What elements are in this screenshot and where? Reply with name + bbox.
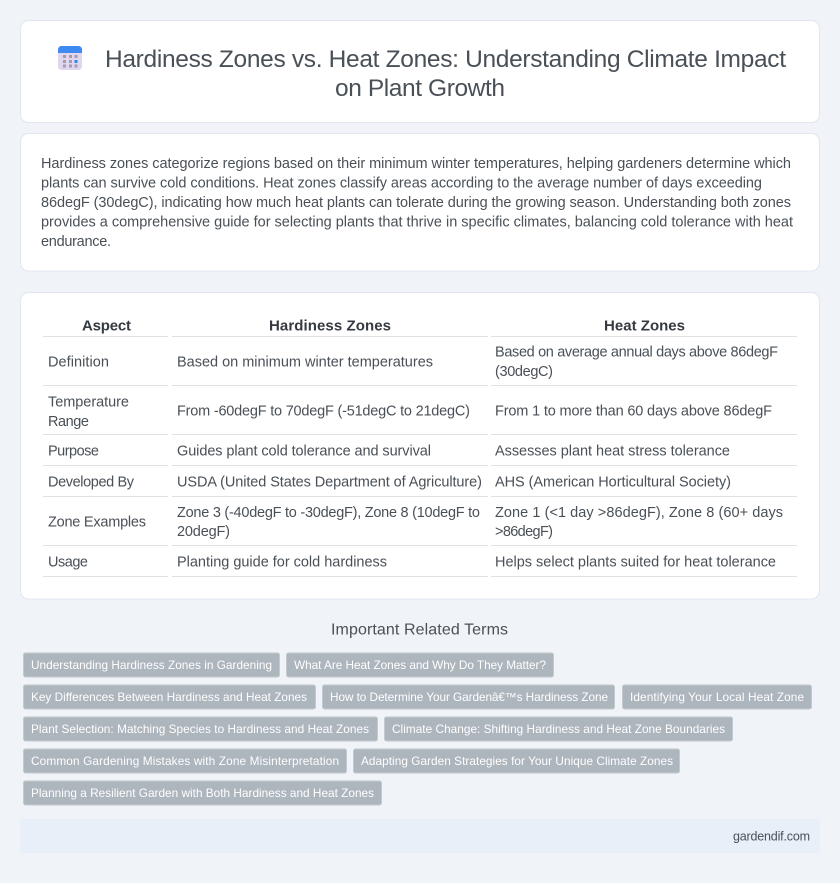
row: temperature range xyxy=(48,394,772,430)
row: temperature range: Range xyxy=(48,414,89,430)
row: usage xyxy=(48,554,776,570)
table header: Heat Zones xyxy=(604,318,685,334)
row: usage: Helps select plants suited for heat tolerance xyxy=(495,554,776,570)
text block: introduction: 86degF (30degC), indicating how much heat plants can tolerate during the growing season. Understanding both zones xyxy=(41,195,791,211)
title: Hardiness Zones vs. Heat Zones: Understanding Climate Impact xyxy=(105,46,786,73)
row: definition: Based on minimum winter temperatures xyxy=(177,354,433,370)
table header: Aspect xyxy=(82,318,131,334)
row: definition xyxy=(48,344,778,380)
row: purpose: Guides plant cold tolerance and survival xyxy=(177,444,431,460)
text block: introduction: Hardiness zones categorize regions based on their minimum winter temperatures, helping gardeners determine which xyxy=(41,156,791,172)
text block: introduction xyxy=(41,156,793,250)
related term tags: Plant Selection: Matching Species to Hardiness and Heat Zones xyxy=(31,722,369,736)
related term tags: Identifying Your Local Heat Zone xyxy=(630,690,804,704)
row: zone examples xyxy=(48,505,783,540)
footer xyxy=(20,819,820,853)
footer: gardendif.com xyxy=(733,830,810,844)
row: zone examples: Zone 1 (<1 day >86degF), Zone 8 (60+ days xyxy=(495,505,783,521)
row: developed by: AHS (American Horticultural Society) xyxy=(495,474,731,490)
icon: calendar xyxy=(58,46,82,70)
row: definition: Based on average annual days above 86degF xyxy=(495,344,778,360)
table header: Hardiness Zones xyxy=(269,318,391,334)
related term tags: Climate Change: Shifting Hardiness and Heat Zone Boundaries xyxy=(392,722,725,736)
row: purpose: Assesses plant heat stress tolerance xyxy=(495,444,730,460)
row: definition: (30degC) xyxy=(495,364,553,380)
heading: important related terms: Important Related Terms xyxy=(331,622,508,638)
panel: comparison table xyxy=(20,292,820,599)
title: on Plant Growth xyxy=(335,75,505,102)
related term tags: Key Differences Between Hardiness and Heat Zones xyxy=(31,690,307,704)
row: usage: Usage xyxy=(48,554,88,570)
row: zone examples: Zone 3 (-40degF to -30degF), Zone 8 (10degF to xyxy=(177,505,480,521)
row: developed by xyxy=(48,474,731,490)
row: temperature range: From 1 to more than 60 days above 86degF xyxy=(495,404,772,420)
row: zone examples: >86degF) xyxy=(495,524,553,540)
related term tags: Understanding Hardiness Zones in Gardening xyxy=(31,658,272,672)
text block: introduction: endurance. xyxy=(41,234,111,250)
panel: header xyxy=(20,20,820,122)
related term tags: Adapting Garden Strategies for Your Unique Climate Zones xyxy=(361,754,673,768)
table header xyxy=(82,318,685,334)
row: purpose: Purpose xyxy=(48,444,99,460)
related term tags xyxy=(24,653,812,805)
row: temperature range: Temperature xyxy=(48,394,129,410)
related term tags: How to Determine Your Gardenâ€™s Hardiness Zone xyxy=(330,690,608,704)
row: developed by: USDA (United States Department of Agriculture) xyxy=(177,474,482,490)
row: temperature range: From -60degF to 70degF (-51degC to 21degC) xyxy=(177,404,470,420)
row: developed by: Developed By xyxy=(48,474,135,490)
title xyxy=(105,46,786,102)
row: zone examples: 20degF) xyxy=(177,524,230,540)
table row lines xyxy=(43,336,797,576)
row: purpose xyxy=(48,444,730,460)
text block: introduction: provides a comprehensive guide for selecting plants that thrive in specific climates, balancing cold tolerance with heat xyxy=(41,214,793,230)
panel: introduction text xyxy=(20,134,820,271)
related term tags: Common Gardening Mistakes with Zone Misinterpretation xyxy=(31,754,339,768)
row: definition: Definition xyxy=(48,354,109,370)
text block: introduction: plants can survive cold conditions. Heat zones classify areas according to the average number of days exceeding xyxy=(41,176,762,192)
row: zone examples: Zone Examples xyxy=(48,514,146,530)
row: usage: Planting guide for cold hardiness xyxy=(177,554,387,570)
related term tags: Planning a Resilient Garden with Both Hardiness and Heat Zones xyxy=(31,786,374,800)
related term tags: What Are Heat Zones and Why Do They Matter? xyxy=(294,658,546,672)
